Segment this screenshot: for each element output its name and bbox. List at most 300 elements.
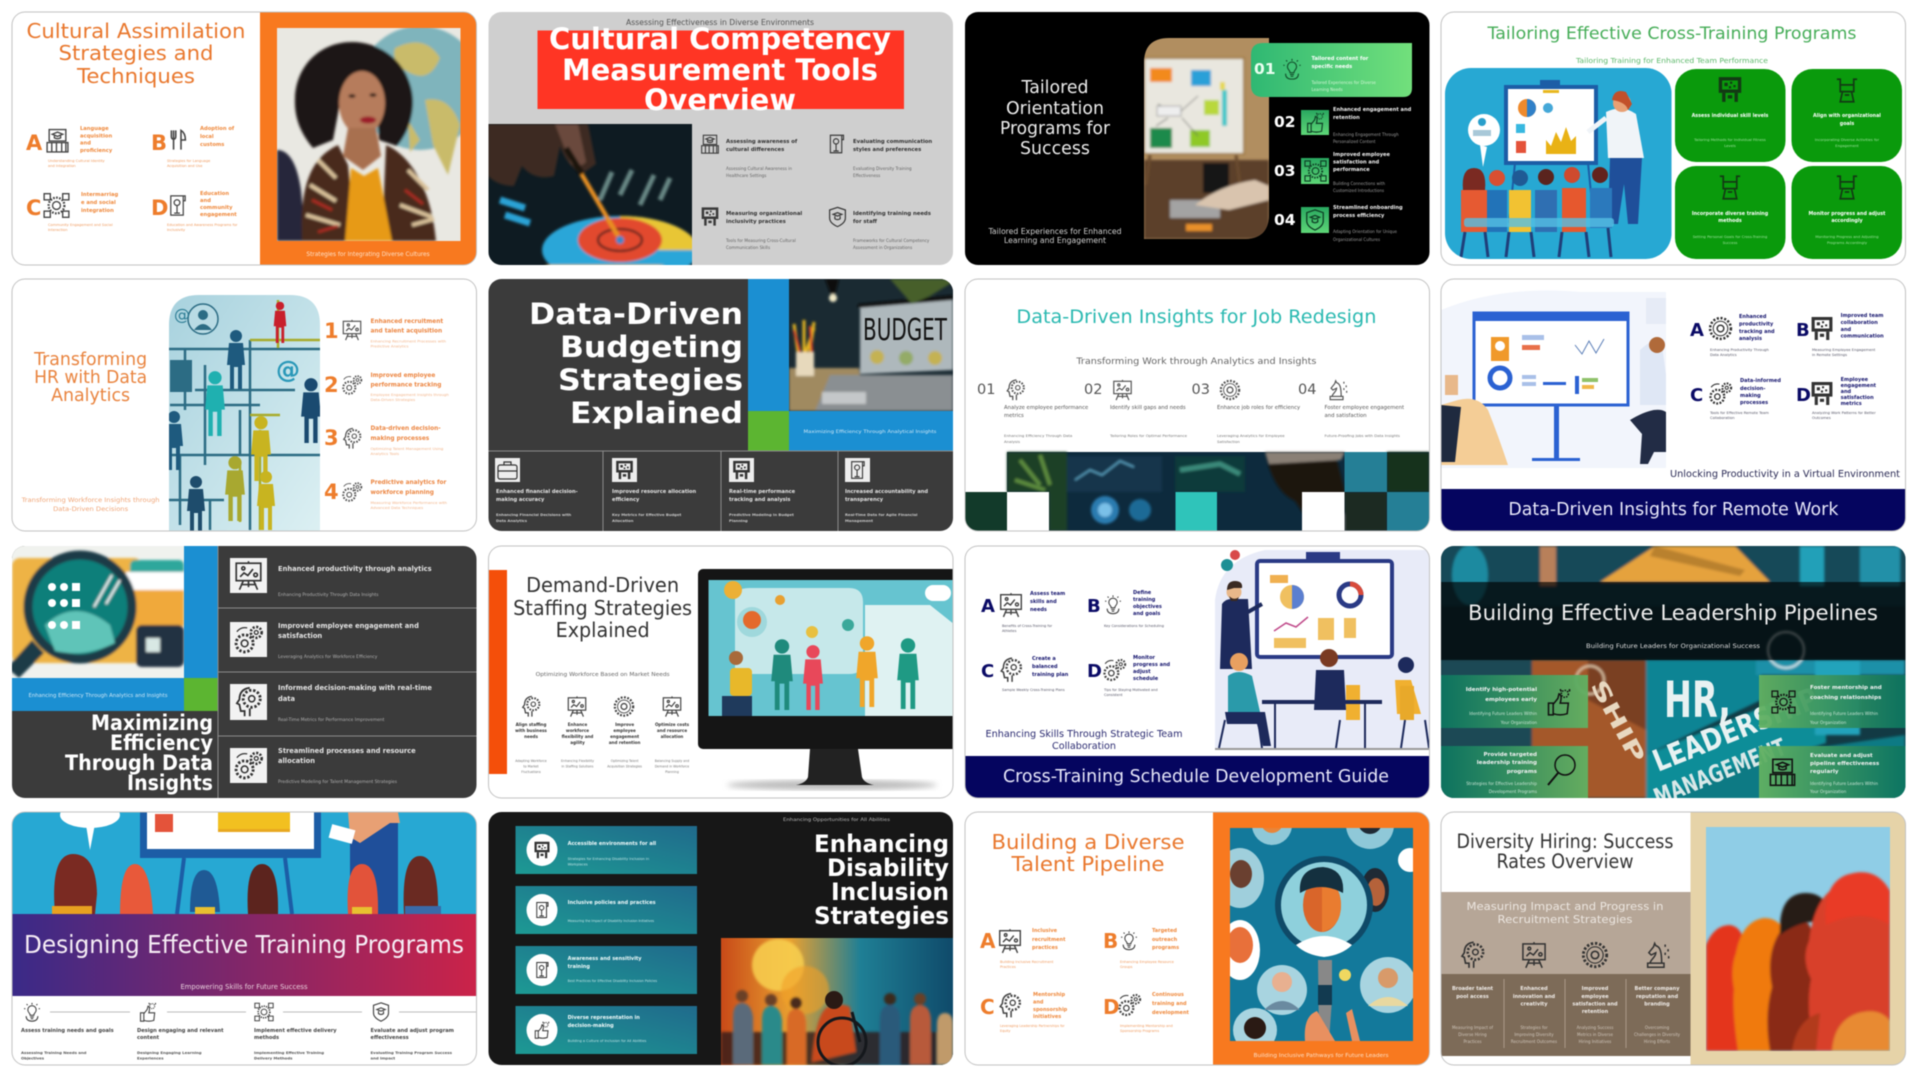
item 3: Data-driven decision- [370, 426, 441, 432]
panel: Tailored Orientation Programs [965, 12, 1430, 265]
column: align staffing: Fluctuations [521, 770, 541, 774]
tile: diverse training methods: Incorporate diverse training [1692, 211, 1769, 217]
title band [1441, 489, 1906, 531]
callout: high-potential [1441, 675, 1588, 728]
photo: planning whiteboard and laptop [1144, 38, 1269, 239]
column: innovation: creativity [1521, 1002, 1548, 1008]
item B: programs [1152, 945, 1179, 951]
callout: mentorship: Your Organization [1809, 720, 1847, 725]
item: communication: Effectiveness [853, 173, 880, 178]
step 04: Foster employee engagement [1324, 405, 1404, 411]
item D: Education and Awareness Programs for [167, 223, 238, 227]
photo: wheelchair user in community circle [721, 938, 953, 1066]
title: Cultural Assimilation: Techniques [76, 64, 195, 88]
item 03: Customized Introductions [1333, 188, 1384, 193]
item 02: retention [1333, 115, 1360, 121]
panel: Tailoring Cross-Training Programs [1441, 12, 1906, 265]
column: innovation: Recruitment Outcomes [1511, 1039, 1557, 1044]
item: training needs: Assessment in Organizations [853, 245, 912, 250]
tile: accessible environments [516, 826, 697, 874]
row: engagement: satisfaction [278, 632, 322, 640]
item 4: 4 [324, 480, 339, 504]
illustration: dashboard on large screen [1441, 290, 1666, 468]
item D [1087, 655, 1171, 697]
step: delivery: Delivery Methods [254, 1056, 293, 1060]
column: flexibility: in Staffing Solutions [562, 764, 594, 768]
item B: customs [200, 142, 224, 148]
item B: Measuring Employee Engagement [1812, 348, 1876, 352]
tile: align with goals: Engagement [1835, 144, 1859, 148]
item 3: 3 [324, 426, 339, 450]
column: accountability: Increased accountability and [845, 489, 928, 495]
subtitle [986, 729, 1182, 752]
item B: Groups [1120, 965, 1133, 969]
callout: leadership training: Development Programs [1489, 789, 1537, 794]
title: Building Effective Leadership Pipelines [1468, 601, 1878, 625]
item: training needs [830, 207, 931, 250]
step 02: Identify skill gaps and needs [1110, 405, 1186, 411]
callout: high-potential: Identify high-potential [1466, 687, 1537, 693]
divider lines [50, 1011, 477, 1013]
column: financial accuracy: Data Analytics [496, 518, 528, 523]
step: design content: Designing Engaging Learning [137, 1050, 202, 1055]
tile: assess skill levels: Assess individual skill levels [1692, 113, 1769, 119]
item A: Benefits of Cross-Training for [1002, 624, 1053, 628]
item B: local [200, 134, 214, 140]
item B: Enhancing Employee Resource [1120, 960, 1174, 964]
item B: Improved team [1841, 313, 1883, 319]
subtitle: Data-Driven Decisions [53, 506, 128, 513]
column: innovation: innovation and [1513, 994, 1556, 1000]
item A: skills and [1030, 599, 1057, 605]
item 03: 03 [1274, 162, 1296, 180]
title: Cultural Assimilation [26, 19, 246, 88]
item C: Sample Weekly Cross-Training Plans [1002, 688, 1065, 692]
item B: B [1103, 929, 1118, 953]
column: reputation: Better company [1635, 986, 1680, 992]
item D: Analyzing Work Patterns for Better [1812, 411, 1876, 415]
column: resource allocation: Improved resource allocation [612, 489, 697, 495]
item A: Enhancing Productivity Through [1710, 348, 1769, 352]
item 04: Organizational Cultures [1333, 237, 1380, 242]
step 01: Analysis [1004, 439, 1020, 444]
callout: leadership training [1441, 746, 1588, 798]
column: resource allocation: efficiency [612, 497, 640, 503]
item C: C [1690, 385, 1703, 406]
accent blocks [12, 546, 218, 711]
item D: D [1103, 995, 1120, 1019]
title: Tailoring Effective Cross-Training Programs [1486, 24, 1857, 44]
item C: Equity [1000, 1029, 1010, 1033]
item D: metrics [1841, 401, 1862, 407]
column: engagement: engagement [610, 734, 639, 739]
callout: high-potential: employees early [1485, 697, 1537, 703]
item 03: performance [1333, 167, 1370, 173]
item B [151, 126, 235, 168]
title [814, 830, 949, 930]
tile: align with goals [1792, 69, 1902, 162]
item D: D [151, 196, 168, 220]
highlighted item 01: Learning Needs [1312, 87, 1343, 92]
panel: Cultural Competency Measurement Tools [488, 12, 953, 284]
row: decision-making: Real-Time Metrics for Performance Improvement [278, 717, 385, 723]
title: Cultural Assimilation: Strategies and [58, 41, 214, 65]
column: costs: and resource [657, 728, 687, 733]
column: align staffing: with business [515, 728, 547, 733]
photo: HR leadership management blocks: HR, [1664, 671, 1731, 729]
tile: diverse training methods [1675, 166, 1786, 259]
item A: tracking and [1739, 329, 1775, 335]
title: Insights [127, 771, 213, 795]
item C: C [26, 196, 41, 220]
title: Success [1020, 138, 1090, 159]
title on red banner: Overview [644, 83, 796, 117]
item D: schedule [1133, 676, 1159, 682]
illustration: trainer presenting to team [1445, 68, 1672, 259]
column: costs: Planning [665, 770, 679, 774]
item 03 [1274, 152, 1390, 193]
item 2: Improved employee [370, 373, 435, 379]
step 04 [1298, 381, 1404, 438]
title band: Empowering Skills for Future Success [180, 982, 308, 991]
title [65, 711, 213, 795]
item D: D [1087, 661, 1102, 682]
item: training needs: Frameworks for Cultural Competency [853, 238, 930, 243]
column: reputation: branding [1644, 1002, 1670, 1008]
column: flexibility: workforce [566, 728, 589, 733]
tile: align with goals: goals [1840, 121, 1854, 127]
step: evaluate: Evaluating Training Program Success [370, 1050, 453, 1055]
item 3 [324, 426, 444, 456]
tile: awareness training: training [568, 964, 590, 970]
title: Tailored [1021, 77, 1088, 98]
panel: measuring impact banner: Measuring Impact and Progress in [1466, 901, 1664, 913]
item: awareness [702, 135, 798, 178]
column: align staffing [515, 696, 547, 774]
column: engagement: employee [613, 728, 636, 733]
row: streamlined: Predictive Modeling for Talent Management Strategies [278, 779, 398, 785]
row: decision-making: data [278, 695, 295, 703]
item: training needs: Identifying training needs [853, 211, 931, 217]
column: financial accuracy: making accuracy [496, 497, 545, 503]
title [513, 573, 692, 642]
photo: profiles in red and orange [1706, 827, 1890, 1051]
panel: Designing Effective Training Programs [12, 802, 477, 1065]
column: satisfaction: satisfaction and [1572, 1002, 1618, 1008]
step 04: and satisfaction [1324, 413, 1367, 419]
row: engagement [230, 622, 419, 660]
tile: inclusive policies: Measuring the Impact of Disability Inclusion Initiatives [568, 919, 654, 923]
item A: acquisition [80, 134, 112, 140]
item 03: Improved employee [1333, 152, 1390, 158]
item A: and Integration [48, 164, 76, 168]
subtitle: Optimizing Workforce Based on Market Needs [536, 672, 670, 678]
column: performance tracking [729, 458, 796, 523]
item D: community [200, 205, 233, 211]
tile: awareness training: Awareness and sensitivity [568, 956, 642, 962]
column: financial accuracy [495, 458, 578, 523]
item C: Data-informed [1740, 378, 1781, 384]
column: accountability: Real-Time Data for Agile Financial [845, 512, 917, 517]
photo: HR leadership management blocks: MANAGEMENT [1650, 733, 1790, 812]
item A: analysis [1739, 336, 1762, 342]
item 04: Adapting Orientation for Unique [1333, 229, 1397, 234]
item B: Key Considerations for Scheduling [1104, 624, 1164, 628]
title on red banner: Cultural Competency [549, 22, 891, 56]
item 1: Enhanced recruitment [370, 319, 443, 325]
item 03: Building Connections with [1333, 181, 1385, 186]
title: Explained [556, 618, 650, 642]
item B: and [1841, 327, 1852, 333]
column: resource allocation: Allocation [612, 518, 634, 523]
item A: Practices [1000, 965, 1016, 969]
title: Talent Pipeline [1010, 852, 1164, 876]
panel: Demand-Driven Staffing Strategies [488, 546, 958, 798]
column: satisfaction [1572, 943, 1618, 1044]
item D [1796, 377, 1877, 420]
item B: and goals [1133, 611, 1160, 617]
panel: Building a Diverse Talent Pipeline [965, 801, 1430, 1065]
callout: leadership training: Provide targeted [1484, 752, 1537, 758]
photo: laptop showing budget: BUDGET [863, 313, 947, 348]
callout: evaluate [1759, 746, 1906, 798]
step 04: Future-Proofing Jobs with Data Insights [1324, 433, 1400, 438]
item A: Assess team [1030, 591, 1065, 597]
row: decision-making [230, 684, 432, 723]
step: design content: Experiences [137, 1056, 164, 1060]
item C: decision- [1740, 386, 1765, 392]
step 01: Analyze employee performance [1004, 405, 1088, 411]
item A [1690, 314, 1775, 357]
item 04: process efficiency [1333, 213, 1385, 219]
subtitle [987, 227, 1122, 245]
highlighted item 01: specific needs [1312, 64, 1352, 70]
caption: Strategies for Integrating Diverse Cultures [306, 252, 430, 258]
subtitle: Learning and Engagement [1004, 236, 1106, 245]
item D: development [1152, 1010, 1190, 1016]
divider lines [488, 451, 953, 531]
column: talent pool: Practices [1463, 1039, 1482, 1044]
item C: integration [81, 208, 114, 214]
step 01 [977, 380, 1088, 444]
item C: Mentorship [1033, 992, 1065, 998]
illustration: magnifier over data [7, 546, 184, 678]
panel: Data-Driven Insights for Remote Work [1441, 279, 1906, 531]
item B: collaboration [1841, 320, 1878, 326]
panel: Cross-Training Schedule Guide [965, 546, 1430, 798]
column: engagement: Improve [615, 722, 634, 727]
item: inclusivity: Measuring organizational [726, 211, 802, 217]
step: assess needs [21, 1003, 114, 1060]
tile: diverse representation: decision-making [568, 1023, 614, 1029]
step 04: 04 [1298, 382, 1316, 398]
title: Inclusion [831, 878, 949, 906]
highlighted item 01: 01 [1254, 60, 1276, 78]
item 1: and talent acquisition [370, 328, 442, 334]
panel: Data-Driven Insights for Job Redesign [965, 279, 1430, 531]
item C: Create a [1032, 656, 1056, 662]
panel: measuring impact banner: Recruitment Strategies [1498, 914, 1632, 926]
item D: and [1841, 389, 1852, 395]
column: talent pool [1452, 942, 1494, 1044]
photo: HR leadership management blocks: SHIP [1585, 676, 1649, 767]
column: innovation: Strategies for [1520, 1025, 1548, 1030]
title: Rates Overview [1496, 850, 1634, 873]
item: awareness: Assessing Cultural Awareness in [726, 166, 792, 171]
title: Diversity Hiring: Success [1456, 830, 1674, 853]
divider lines [218, 546, 477, 798]
callout: high-potential: Identifying Future Leaders Within [1469, 711, 1537, 716]
item D: Continuous [1152, 992, 1184, 998]
item C: sponsorship [1033, 1007, 1068, 1013]
tile: awareness training [516, 946, 697, 994]
title: Strategies [814, 902, 949, 930]
callout: mentorship [1759, 675, 1906, 728]
item C [1690, 378, 1781, 420]
illustration: connected people network: @ [174, 305, 190, 324]
item 2: Data-Driven Strategies [370, 397, 415, 402]
illustration: monitor with team [698, 569, 958, 790]
item 1 [324, 319, 446, 348]
step: assess needs: Objectives [21, 1056, 45, 1060]
tile: align with goals: Align with organizational [1813, 113, 1881, 119]
column: flexibility: Enhance [568, 722, 587, 727]
column: costs [655, 696, 690, 774]
column: accountability: Management [845, 518, 873, 523]
item 2: performance tracking [370, 382, 441, 388]
step: evaluate: and Impact [370, 1056, 395, 1060]
item A: A [980, 929, 996, 953]
item C: e and social [81, 200, 116, 206]
item D: progress and [1133, 662, 1171, 668]
callout: mentorship: coaching relationships [1810, 695, 1882, 701]
item B: communication [1841, 334, 1884, 340]
item 2: 2 [324, 373, 339, 397]
title: Orientation [1006, 98, 1104, 119]
column: accountability [845, 458, 928, 523]
item A: Data Analytics [1710, 353, 1737, 357]
item: communication: Evaluating communication [853, 139, 932, 145]
item A: A [981, 596, 995, 617]
subtitle: Transforming Workforce Insights through [21, 497, 160, 504]
tile: inclusive policies [516, 886, 697, 934]
step: evaluate: effectiveness [370, 1035, 409, 1041]
column: costs: allocation [661, 734, 683, 739]
illustration: audience watching presenter [12, 802, 476, 914]
step 03 [1192, 381, 1300, 444]
column: performance tracking: Real-time performance [729, 489, 796, 495]
step: assess needs: Assess training needs and goals [21, 1028, 114, 1034]
step 01: metrics [1004, 413, 1024, 419]
tile: align with goals: Incorporating Diverse Activities for [1815, 138, 1880, 142]
step: design content: Design engaging and relevant [137, 1028, 224, 1034]
title: Explained [570, 396, 743, 430]
item A: A [26, 131, 43, 155]
item A: Athletes [1002, 629, 1017, 633]
item C [980, 992, 1068, 1033]
title: Transforming [33, 349, 147, 370]
step 02: Tailoring Roles for Optimal Performance [1109, 433, 1188, 438]
item B: in Remote Settings [1812, 353, 1847, 357]
panel: Transforming HR with Data Analytics [21, 294, 449, 532]
callout: high-potential: Your Organization [1500, 720, 1537, 725]
item B: objectives [1133, 604, 1162, 610]
item C: initiatives [1033, 1014, 1061, 1020]
item: awareness: Healthcare Settings [726, 173, 766, 178]
highlighted item 01: Tailored content for [1312, 56, 1369, 62]
column: costs: Optimize costs [655, 722, 690, 727]
column: costs: Demand in Workforce [655, 764, 689, 768]
item: inclusivity: Tools for Measuring Cross-Cultural [725, 238, 796, 243]
photo: HR leadership management blocks [1441, 545, 1906, 812]
item C: Collaboration [1710, 416, 1735, 420]
title: Data-Driven [529, 297, 743, 331]
subtitle: Enhancing Skills Through Strategic Team [986, 729, 1182, 740]
subtitle: Tailored Experiences for Enhanced [987, 227, 1122, 236]
tile: assess skill levels [1675, 69, 1786, 162]
item: communication [830, 135, 932, 178]
item B: Acquisition and Use [167, 164, 203, 168]
row: productivity [230, 558, 432, 598]
title: Analytics [51, 385, 130, 406]
item D: Sponsorship Programs [1120, 1029, 1159, 1033]
tile: assess skill levels: Tailoring Methods for Individual Fitness [1693, 138, 1766, 142]
title: Cultural Assimilation: Cultural Assimilation [26, 19, 246, 43]
column: accountability: transparency [845, 497, 884, 503]
item: communication: styles and preferences [853, 147, 921, 153]
photo: hand with pen over target chart [488, 123, 693, 266]
column: talent pool: pool access [1456, 994, 1489, 1000]
callout: mentorship: Identifying Future Leaders Within [1810, 711, 1878, 716]
item 3: Optimizing Talent Management Using [370, 446, 444, 451]
tile: monitor progress: Programs Accordingly [1827, 241, 1868, 245]
item A: practices [1032, 945, 1058, 951]
illustration: team meeting at board [1215, 550, 1429, 750]
column: reputation: reputation and [1636, 994, 1678, 1000]
column: reputation [1634, 943, 1681, 1044]
item 3: Analytics Tools [370, 451, 399, 456]
illustration: magnifier over diverse faces [1216, 801, 1422, 1052]
item 02: Enhanced engagement and [1333, 107, 1412, 113]
item B: Adoption of [200, 126, 235, 132]
item A [26, 126, 113, 168]
tile: inclusive policies: Inclusive policies and practices [568, 900, 656, 906]
lower metrics band [1441, 974, 1690, 1056]
item D: Monitor [1133, 655, 1156, 661]
photo: HR leadership management blocks: LEADERSHIP [1648, 681, 1823, 779]
column: satisfaction: Hiring Initiatives [1579, 1039, 1611, 1044]
subtitle: Building Future Leaders for Organizational Success [1586, 643, 1760, 650]
panel: Data-Driven Budgeting Strategies [488, 279, 953, 531]
tile: diverse representation [516, 1006, 697, 1054]
panel: Cultural Assimilation Strategies [12, 12, 482, 265]
step 02: 02 [1084, 382, 1102, 398]
highlighted item 01 [1251, 43, 1412, 97]
item C: C [981, 661, 994, 682]
title: Strategies [558, 363, 743, 397]
item B [1103, 928, 1179, 969]
title on red banner [536, 26, 905, 111]
step: evaluate [370, 1003, 454, 1060]
title [1456, 830, 1674, 873]
tile: diverse training methods: methods [1718, 218, 1742, 224]
item 4: workforce planning [370, 490, 434, 496]
tile: accessible environments: Workplaces [568, 862, 588, 866]
illustration: connected people network [165, 295, 321, 535]
item A: Inclusive [1032, 928, 1058, 934]
callout: leadership training: leadership training [1477, 760, 1537, 766]
item 3: making processes [370, 436, 430, 442]
